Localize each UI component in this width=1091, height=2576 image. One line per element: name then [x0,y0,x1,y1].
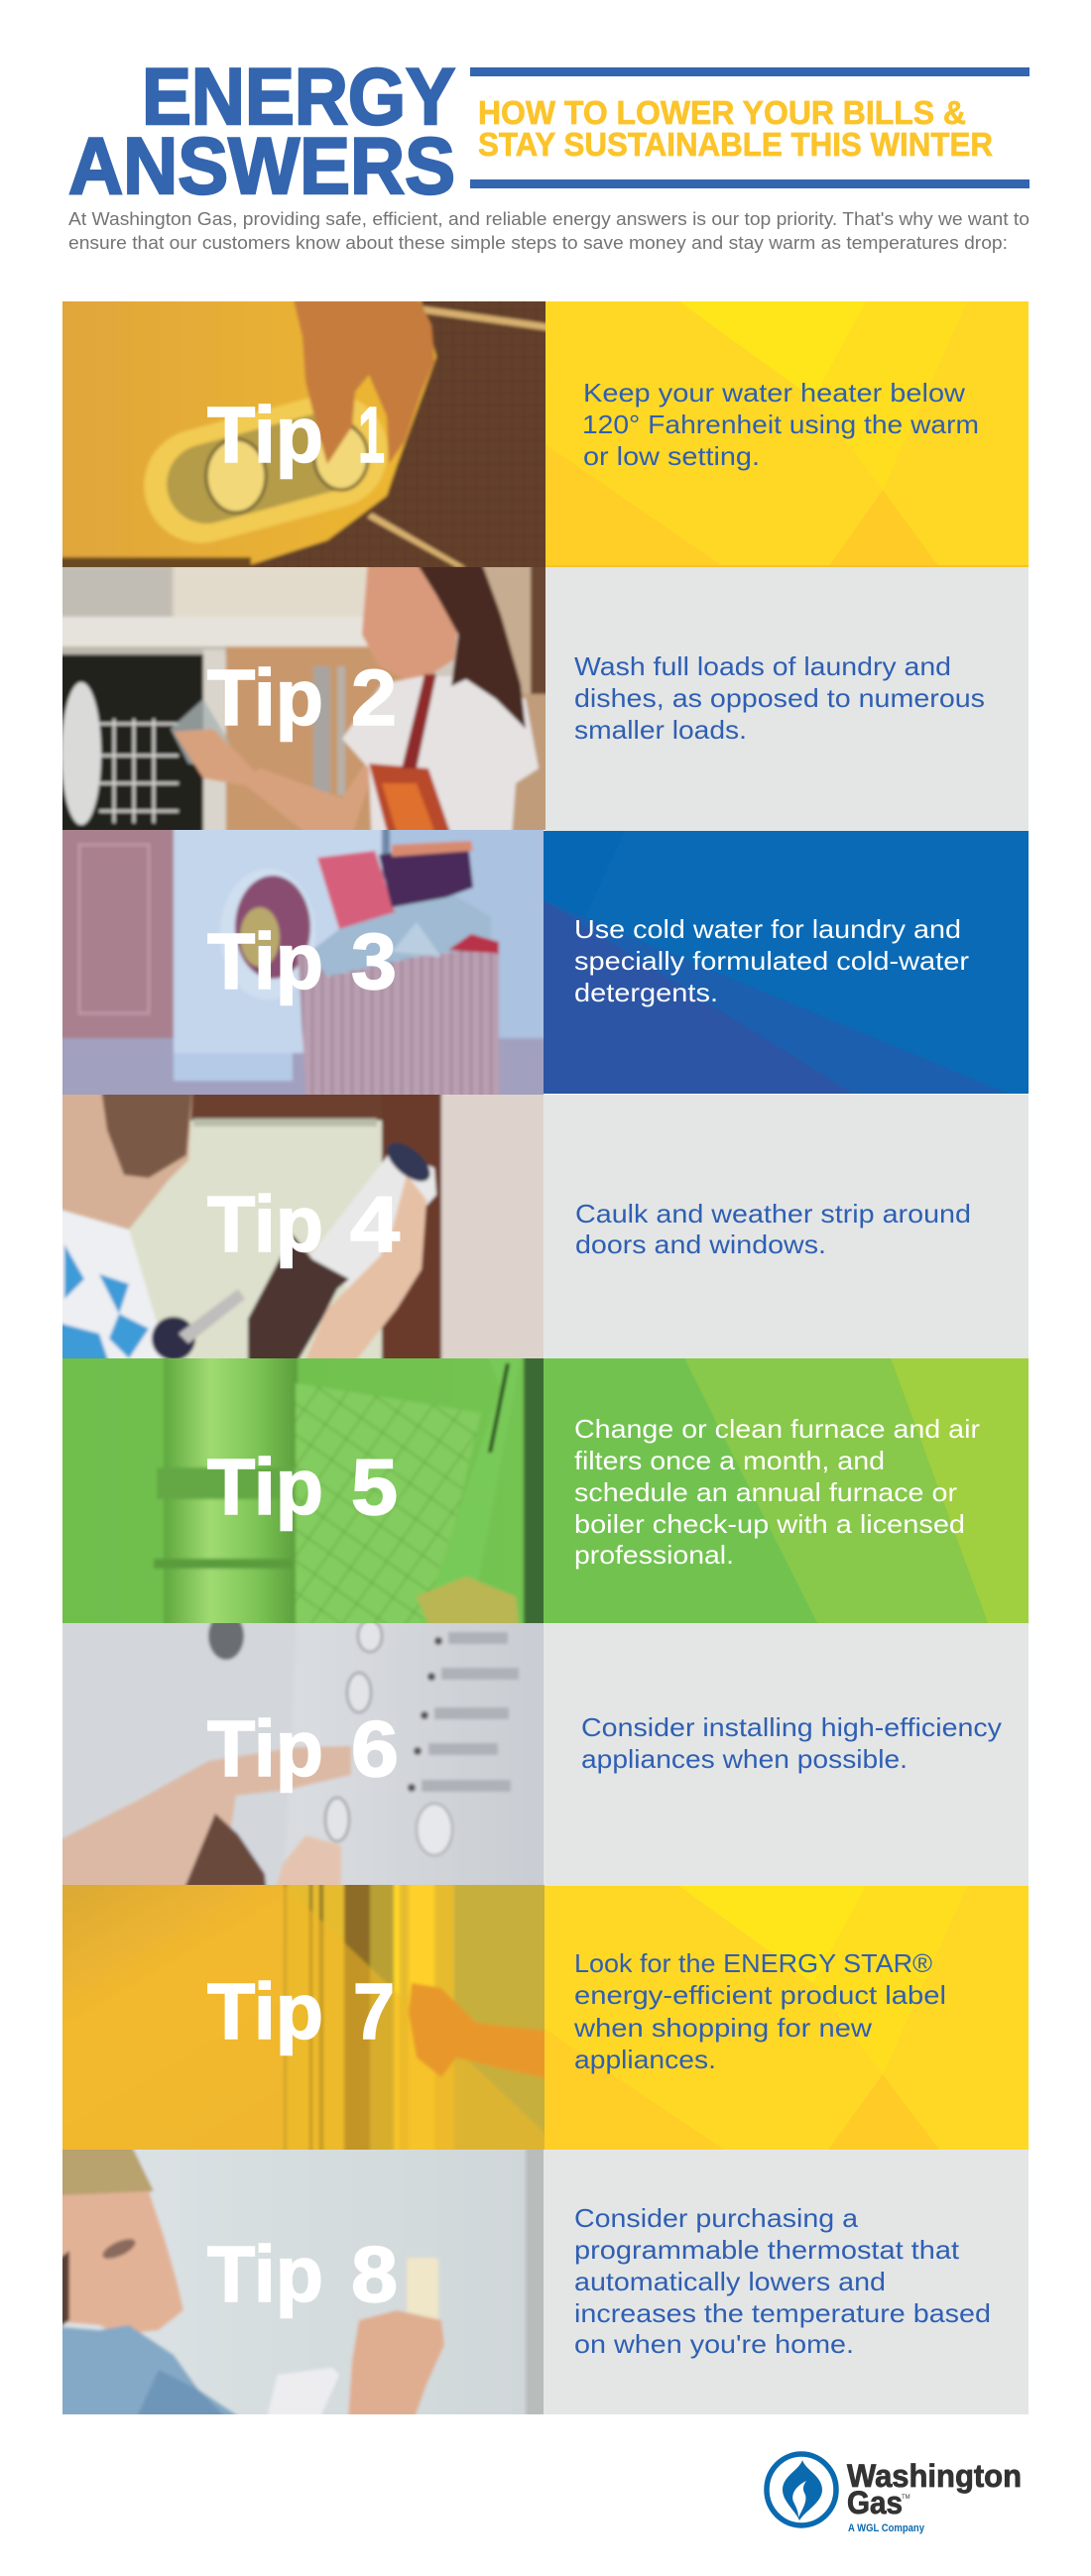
subtitle with rules [470,67,1030,188]
photo: woman at dishwasher [62,567,546,830]
tip label: Tip [207,1443,323,1531]
tip text: when shopping for new [573,2013,872,2043]
wordmark [847,2458,1022,2534]
tip text: or low setting. [583,441,760,471]
intro text [68,208,1030,253]
photo: water heater dial [62,301,546,567]
tip text: professional. [574,1540,734,1570]
header [68,53,1030,253]
background: gray [544,1095,1029,1358]
subtitle with rules: STAY SUSTAINABLE THIS WINTER [478,126,993,163]
panel: tip 1 [62,301,1029,567]
tip text [574,651,985,745]
logo: Washington Gas [767,2454,1022,2534]
background: yellow facets [546,301,1029,567]
tip label: Tip [207,2230,323,2318]
wordmark: A WGL Company [848,2522,925,2534]
tip text [573,1948,946,2074]
tip text [574,2203,991,2359]
tip text: Wash full loads of laundry and [574,651,951,681]
background: gray [544,2150,1029,2414]
photo: woman at thermostat [62,2150,544,2414]
tip label [207,1443,398,1531]
panel: tip 7 [62,1885,1029,2150]
tip text: doors and windows. [575,1229,826,1259]
photo: caulking a window [62,1095,544,1358]
background: blue facets [544,831,1029,1094]
photo: refrigerator door [62,1885,545,2150]
photo: washer control panel [62,1623,544,1885]
tip text: schedule an annual furnace or [574,1477,957,1507]
tip label [207,1967,395,2055]
tip label: Tip [207,391,323,479]
tip text [574,914,969,1007]
tip text: appliances. [574,2045,716,2074]
icon: flame in ring [767,2454,836,2525]
tip label: Tip [207,653,323,742]
tip text [575,1199,971,1259]
title: ANSWERS [68,122,455,211]
panel: tip 3 [62,830,1029,1095]
panel: tip 6 [62,1623,1029,1886]
tip label: 1 [358,391,385,479]
tip label: 5 [351,1443,398,1531]
background: yellow facets [545,1886,1029,2150]
tip text: Keep your water heater below [583,378,965,408]
tip text: Change or clean furnace and air [574,1414,980,1444]
tip label: 7 [353,1967,395,2055]
tip label [207,391,385,479]
wordmark: Gas [847,2485,903,2520]
photo: furnace filter [62,1358,544,1623]
panel: tip 5 [62,1358,1029,1623]
tip text: Caulk and weather strip around [575,1199,971,1229]
tip label: Tip [207,1967,323,2055]
wordmark: Washington [847,2458,1022,2494]
tip text: automatically lowers and [574,2267,886,2296]
tip text: boiler check-up with a licensed [574,1509,965,1539]
tip label: 6 [351,1704,399,1793]
tip text: specially formulated cold-water [574,946,969,976]
tip text: programmable thermostat that [574,2235,960,2265]
tip text: energy-efficient product label [574,1980,946,2010]
tip text: 120° Fahrenheit using the warm [582,410,979,439]
tip text: Look for the ENERGY STAR® [574,1948,932,1978]
wordmark: TM [902,2495,910,2501]
tip text: Consider purchasing a [574,2203,859,2233]
tip label: 3 [351,917,397,1005]
tip text: Use cold water for laundry and [574,914,961,944]
photo: laundry basket [62,830,544,1095]
tip label: 2 [351,653,397,742]
background: gray [546,567,1029,831]
tip text [574,1414,980,1570]
panel: tip 2 [62,567,1029,831]
background: green facets [544,1358,1029,1623]
tip label [207,1704,399,1793]
tip text: smaller loads. [574,715,747,745]
tip text [582,378,979,471]
tip text: on when you're home. [574,2329,854,2359]
tip label [207,1180,401,1268]
tip text: dishes, as opposed to numerous [574,683,985,713]
panel: tip 8 [62,2150,1029,2414]
tip text: detergents. [574,978,718,1007]
intro text: At Washington Gas, providing safe, efficient, and reliable energy answers is our top priority. That's why we want to [68,208,1030,229]
tip label: 4 [350,1180,401,1268]
tip text: Consider installing high-efficiency [581,1712,1002,1742]
tip label [207,653,397,742]
tip text: increases the temperature based [574,2298,991,2328]
title [68,53,455,211]
tip text: filters once a month, and [574,1446,885,1475]
tip text [581,1712,1002,1774]
intro text: ensure that our customers know about these simple steps to save money and stay warm as temperatures drop: [68,232,1008,253]
tip label: Tip [207,1704,323,1793]
background: gray [544,1623,1029,1886]
tip label: 8 [351,2230,398,2318]
title: ENERGY [142,53,455,142]
tip label: Tip [207,917,323,1005]
subtitle with rules: HOW TO LOWER YOUR BILLS & [478,94,966,131]
panel: tip 4 [62,1095,1029,1358]
tip text: appliances when possible. [581,1744,908,1774]
tip label [207,917,397,1005]
tip label [207,2230,398,2318]
tip label: Tip [207,1180,323,1268]
